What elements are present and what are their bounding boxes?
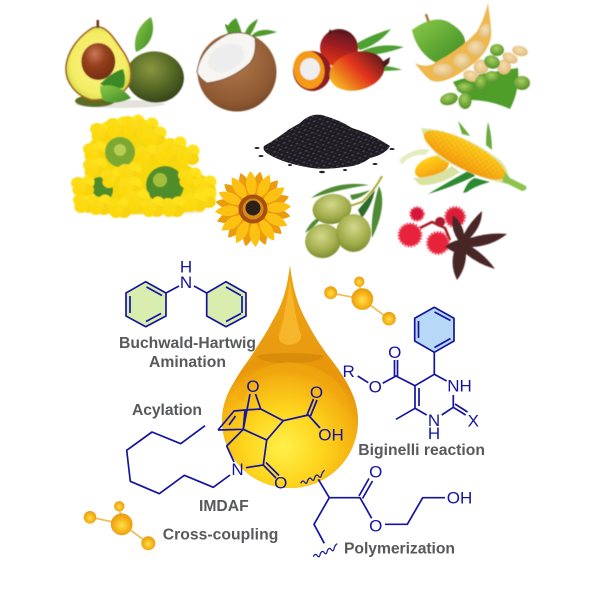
molecule: polymer: O (369, 516, 382, 536)
molecule icon: upper (324, 276, 396, 326)
molecule: Biginelli product: H (428, 424, 440, 443)
label: Cross-coupling: Cross-coupling (163, 526, 278, 543)
molecule: Biginelli product: N (428, 411, 440, 430)
molecule: IMDAF adduct: O (246, 377, 260, 396)
label: Buchwald-Hartwig Amination (119, 335, 256, 371)
molecule: Biginelli product: O (369, 378, 382, 396)
molecule icon: lower (84, 501, 155, 550)
molecule: diphenylamine: H (180, 258, 192, 276)
molecule: Biginelli product: R (343, 362, 355, 381)
icon: sunflower (215, 171, 291, 247)
molecule: IMDAF adduct: O (274, 474, 287, 492)
icon: corn (399, 121, 526, 194)
molecule: Biginelli product: X (468, 412, 479, 431)
molecule: IMDAF adduct (127, 377, 344, 494)
molecule: Biginelli product: NH (447, 377, 472, 396)
molecule: IMDAF adduct: OH (318, 426, 344, 445)
oil drop (222, 265, 358, 488)
molecule: Biginelli product: O (388, 343, 401, 362)
molecule: IMDAF adduct: N (231, 460, 244, 479)
molecule: polymer (301, 462, 472, 557)
label: Acylation: Acylation (132, 402, 202, 419)
icon: black sesame seeds (254, 115, 394, 173)
molecule: Biginelli product (343, 307, 479, 443)
molecule: polymer: O (369, 462, 382, 482)
icon: castor leaf and fruit (399, 208, 507, 280)
icon: rapeseed flowers (71, 114, 216, 218)
label: IMDAF: IMDAF (199, 498, 249, 515)
label: Polymerization: Polymerization (344, 540, 455, 557)
molecule: IMDAF adduct: O (310, 383, 323, 402)
icon: olives (300, 176, 382, 263)
molecule: diphenylamine: N (180, 273, 192, 292)
label: Biginelli reaction: Biginelli reaction (358, 442, 485, 459)
molecule: diphenylamine (126, 258, 246, 327)
icon: palm fruit (290, 29, 404, 97)
label: Buchwald-Hartwig Amination: Buchwald-Hartwig (119, 335, 256, 352)
icon: soybean (412, 3, 530, 109)
icon: coconut (197, 18, 277, 112)
icon: avocado (66, 17, 187, 108)
molecule: polymer: OH (447, 488, 472, 507)
label: Buchwald-Hartwig Amination: Amination (149, 354, 226, 371)
